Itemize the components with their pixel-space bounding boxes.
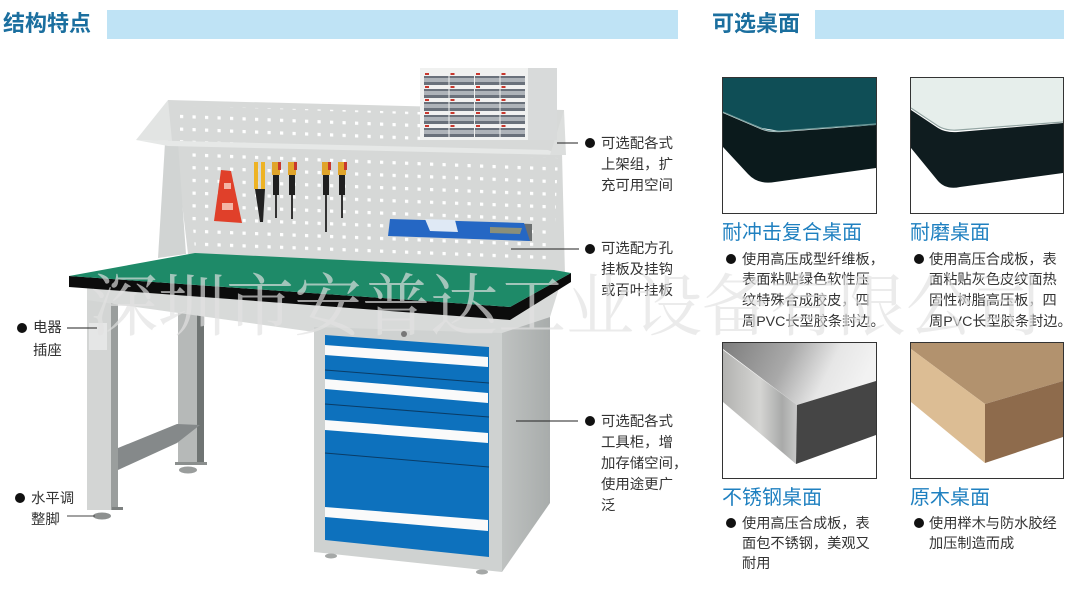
callout: cabinet option <box>516 413 687 514</box>
callout: cabinet option: 泛 <box>601 497 615 514</box>
panel: stainless steel tabletop: 不锈钢桌面 <box>722 486 822 509</box>
title: optional tabletops: 可选桌面 <box>712 11 800 36</box>
panel: impact resistant tabletop: 纹特殊合成胶皮，四 <box>742 292 870 309</box>
panel: solid wood tabletop <box>910 342 1064 552</box>
panel: wear resistant tabletop: 面粘贴灰色皮纹面热 <box>929 271 1057 288</box>
callout: pegboard option <box>511 240 673 299</box>
blue parts bins <box>388 219 532 241</box>
watermark: 深圳市安普达工业设备有限公司 <box>90 269 1042 345</box>
rear leg <box>175 300 207 474</box>
upper pegboard panel <box>168 100 564 154</box>
front leg <box>87 297 123 520</box>
left post <box>158 143 186 258</box>
title: optional tabletops <box>712 10 1064 39</box>
tool cabinet <box>314 317 550 574</box>
panel: stainless steel tabletop: 耐用 <box>742 556 770 572</box>
callout: pegboard option: 挂板及挂钩 <box>601 261 673 278</box>
panel: stainless steel tabletop: 使用高压合成板，表 <box>742 515 870 532</box>
swatch: grey laminate <box>910 78 1064 214</box>
title: structure features: 结构特点 <box>3 11 91 36</box>
callout: cabinet option: 可选配各式 <box>601 413 673 430</box>
callout: cabinet option: 使用途更广 <box>601 476 673 493</box>
panel: impact resistant tabletop: 表面粘贴绿色软性压 <box>742 271 870 288</box>
socket <box>89 323 107 350</box>
panel: solid wood tabletop: 使用榉木与防水胶经 <box>929 515 1057 532</box>
panel: wear resistant tabletop: 使用高压合成板，表 <box>929 251 1057 268</box>
apron <box>87 285 560 335</box>
swatch: solid wood <box>910 342 1064 478</box>
tabletop <box>69 253 571 320</box>
callout: pegboard option: 或百叶挂板 <box>601 282 673 299</box>
callout: electrical socket: 插座 <box>33 342 62 359</box>
title: structure features <box>3 10 678 39</box>
callout: electrical socket: 电器 <box>33 319 62 336</box>
panel: wear resistant tabletop: 固性树脂高压板，四 <box>929 292 1057 309</box>
swatch: stainless steel <box>722 342 876 478</box>
callout: leveling foot: 整脚 <box>31 511 60 528</box>
callout: pegboard option: 可选配方孔 <box>601 240 673 257</box>
shelf <box>136 100 566 155</box>
callout: cabinet option: 加存储空间， <box>601 455 687 472</box>
panel: stainless steel tabletop <box>722 342 876 572</box>
callout: leveling foot: 水平调 <box>31 490 74 507</box>
crossbar <box>118 424 200 470</box>
panel: stainless steel tabletop: 面包不锈钢，美观又 <box>742 536 870 552</box>
panel: impact resistant tabletop: 使用高压成型纤维板， <box>742 251 884 268</box>
callout: electrical socket <box>17 319 97 359</box>
swatch: green laminate <box>722 78 876 214</box>
callout: shelf option: 上架组，扩 <box>601 156 673 173</box>
panel: solid wood tabletop: 加压制造而成 <box>929 536 1014 552</box>
callout: leveling foot <box>15 490 95 528</box>
panel: wear resistant tabletop: 耐磨桌面 <box>910 221 990 244</box>
callout: cabinet option: 工具柜，增 <box>601 434 673 451</box>
hanging tools <box>214 162 347 232</box>
lower pegboard panel <box>175 143 565 275</box>
callout: shelf option <box>557 135 673 194</box>
panel: impact resistant tabletop: 耐冲击复合桌面 <box>722 221 862 244</box>
drawer organizer <box>420 68 557 140</box>
panel: impact resistant tabletop: 周PVC长型胶条封边。 <box>742 313 885 330</box>
illustration: workbench <box>69 68 571 574</box>
callout: shelf option: 充可用空间 <box>601 177 673 194</box>
panel: impact resistant tabletop <box>722 78 885 330</box>
panel: wear resistant tabletop <box>910 78 1066 330</box>
panel: solid wood tabletop: 原木桌面 <box>910 486 990 509</box>
callout: shelf option: 可选配各式 <box>601 135 673 152</box>
